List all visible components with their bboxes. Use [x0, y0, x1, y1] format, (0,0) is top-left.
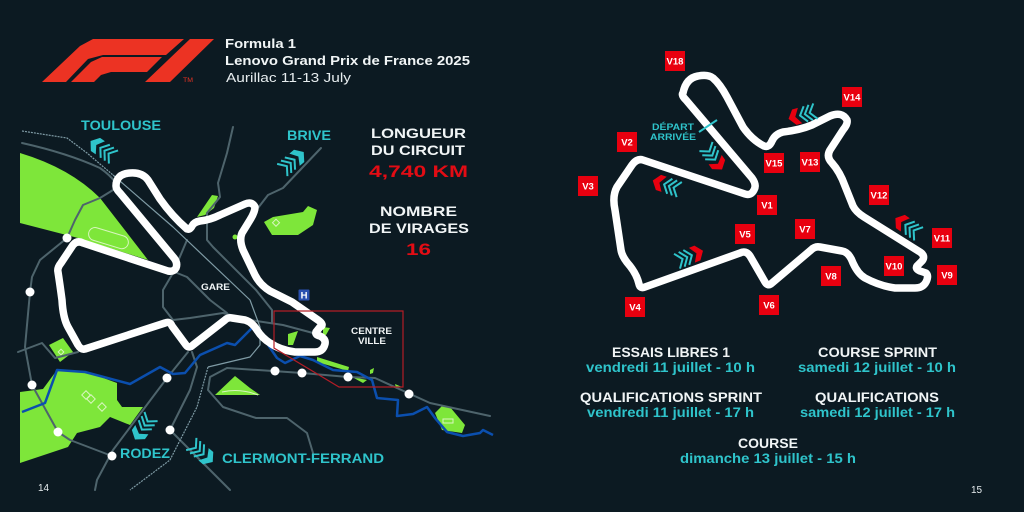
direction: Toulouse: [81, 118, 161, 164]
turn markers: V5: [739, 230, 752, 240]
direction: Rodez: [120, 412, 170, 461]
direction: Brive: [277, 128, 331, 176]
direction: Rodez: RODEZ: [120, 446, 170, 461]
turn markers: V3: [582, 182, 594, 192]
stat: circuit length: 4,740 KM: [369, 162, 468, 181]
session: qualifications: [800, 390, 955, 420]
green areas: [20, 153, 465, 463]
junction dots: [26, 234, 414, 460]
F1 logo: [42, 39, 214, 84]
label: depart arrivee: DÉPART: [652, 122, 695, 132]
direction arrows: [650, 103, 923, 269]
session: essais libres 1: [586, 345, 755, 375]
turn markers: V15: [766, 158, 783, 170]
session: qualifications sprint: vendredi 11 juillet - 17 h: [587, 405, 754, 420]
session: qualifications: QUALIFICATIONS: [815, 390, 939, 405]
event title: Aurillac 11-13 July: [226, 70, 352, 85]
schedule: [580, 345, 956, 466]
turn markers: V7: [799, 224, 811, 236]
city map: [18, 127, 493, 490]
stat: circuit length: [369, 126, 468, 181]
stat: circuit length: DU CIRCUIT: [371, 143, 466, 158]
session: essais libres 1: vendredi 11 juillet - 10 h: [586, 360, 755, 375]
label: gare: GARE: [201, 282, 230, 293]
centre ville box: [274, 311, 403, 387]
turn markers: V6: [763, 300, 775, 312]
turn markers: V13: [802, 158, 818, 168]
turn markers: V12: [871, 190, 887, 202]
turn markers: V9: [941, 270, 953, 282]
start finish line: [699, 120, 717, 132]
event title: Lenovo Grand Prix de France 2025: [225, 53, 470, 68]
direction: Toulouse: TOULOUSE: [81, 118, 161, 133]
page number 14: 14: [38, 483, 50, 494]
session: qualifications sprint: QUALIFICATIONS SPRINT: [580, 390, 763, 405]
stat: number of turns: NOMBRE: [380, 204, 457, 219]
direction: Clermont-Ferrand: CLERMONT-FERRAND: [222, 451, 384, 466]
event title: Formula 1: [225, 36, 296, 51]
stat: number of turns: DE VIRAGES: [369, 221, 469, 236]
direction: Brive: BRIVE: [287, 128, 331, 143]
label: centre ville: VILLE: [358, 336, 386, 346]
circuit map: [578, 51, 957, 317]
label: depart arrivee: ARRIVÉE: [650, 132, 696, 142]
left circuit: [58, 173, 325, 352]
river: [22, 328, 493, 436]
roads: [18, 127, 490, 490]
label: centre ville: CENTRE: [351, 326, 392, 336]
park details: [58, 219, 453, 423]
turn markers: V4: [629, 302, 642, 314]
turn markers: V11: [934, 234, 951, 244]
session: course sprint: [798, 345, 956, 375]
page number 15: 15: [971, 485, 983, 496]
turn markers: V10: [886, 262, 902, 272]
stat: number of turns: 16: [406, 240, 431, 259]
turn markers: V2: [621, 138, 633, 148]
session: essais libres 1: ESSAIS LIBRES 1: [612, 345, 730, 360]
icon: hospital: [298, 290, 310, 302]
session: course: [680, 436, 856, 466]
F1 logo: TM: [183, 78, 193, 84]
session: qualifications sprint: [580, 390, 763, 420]
session: course: COURSE: [738, 436, 798, 451]
turn markers: [578, 51, 957, 317]
stat: number of turns: [369, 204, 469, 259]
event title: [225, 36, 470, 85]
session: qualifications: samedi 12 juillet - 17 h: [800, 405, 955, 420]
turn markers: V8: [825, 272, 837, 282]
track: [614, 75, 928, 288]
stat: circuit length: LONGUEUR: [371, 126, 466, 141]
label: depart arrivee: [650, 122, 696, 142]
turn markers: V1: [761, 200, 774, 212]
session: course: dimanche 13 juillet - 15 h: [680, 451, 856, 466]
icon: hospital: H: [301, 290, 308, 302]
direction: Clermont-Ferrand: [186, 438, 384, 468]
session: course sprint: samedi 12 juillet - 10 h: [798, 360, 956, 375]
label: centre ville: [351, 326, 392, 346]
session: course sprint: COURSE SPRINT: [818, 345, 938, 360]
turn markers: V18: [667, 56, 683, 68]
turn markers: V14: [844, 92, 861, 104]
